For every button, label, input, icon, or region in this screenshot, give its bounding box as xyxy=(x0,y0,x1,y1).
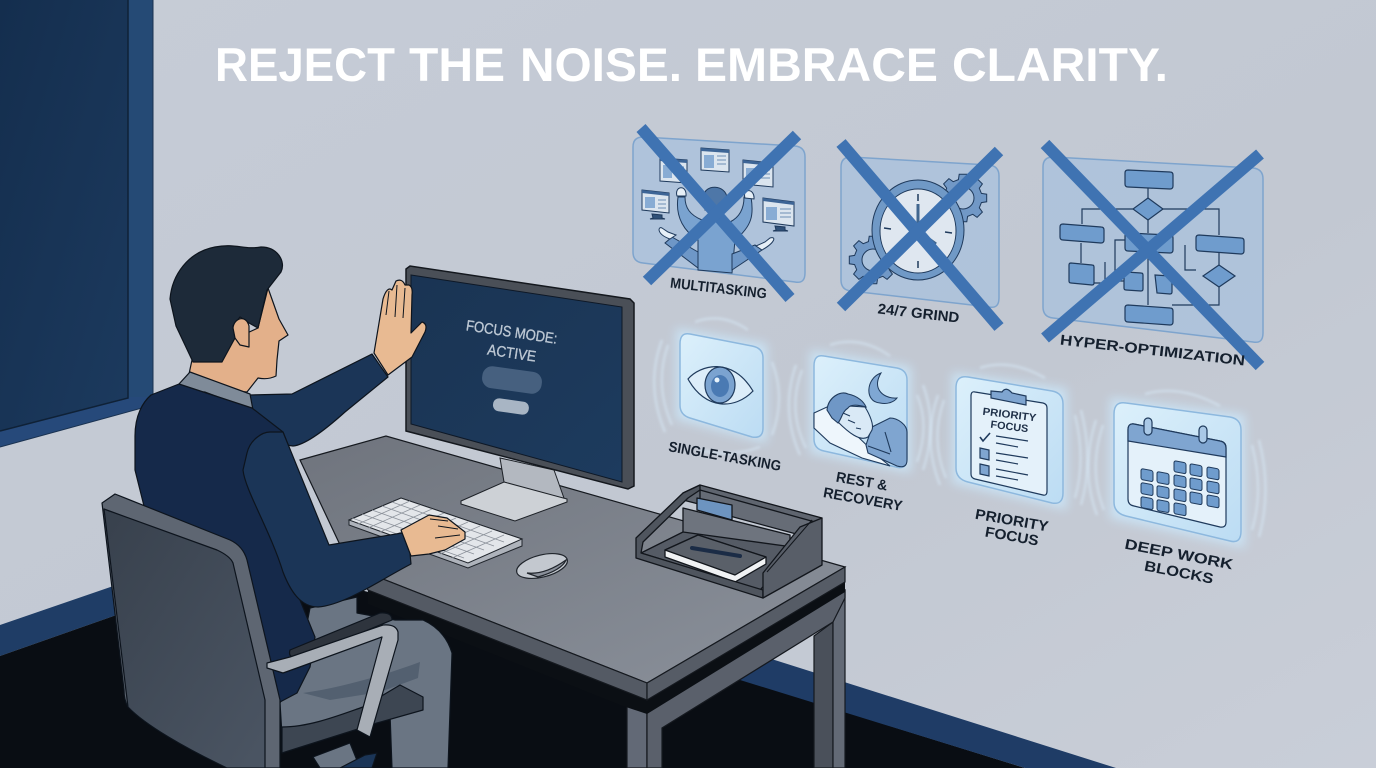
armrest pad xyxy=(290,613,392,658)
panel: hyper-optimization xyxy=(1043,144,1263,370)
tray sides xyxy=(636,485,763,598)
notebook xyxy=(665,535,766,582)
collar xyxy=(179,372,253,410)
desk tray with notebook xyxy=(636,485,822,598)
lower arm sleeve xyxy=(243,432,411,607)
panel: priority focus xyxy=(930,365,1088,550)
keyboard xyxy=(349,498,522,568)
armrest frame xyxy=(267,625,398,737)
tray back interior xyxy=(683,485,822,530)
chair seat xyxy=(282,685,423,753)
torso xyxy=(135,384,325,702)
glow: deep work blocks xyxy=(1088,391,1266,543)
icon: crossed out X xyxy=(641,128,797,298)
desk left leg xyxy=(627,705,662,768)
label: deep work blocks: DEEP WORK xyxy=(1123,537,1235,574)
title: REJECT xyxy=(215,38,395,91)
raised hand xyxy=(374,280,426,375)
label: priority focus: FOCUS xyxy=(984,524,1040,550)
panel: single-tasking xyxy=(654,318,782,475)
icon: crescent moon xyxy=(869,373,897,404)
icon: calendar xyxy=(1128,418,1226,527)
window xyxy=(0,0,153,447)
label: deep work blocks xyxy=(1123,537,1235,588)
icon: eye xyxy=(688,367,753,404)
label: 24/7 grind: 24/7 GRIND xyxy=(877,301,960,327)
panel: deep work blocks xyxy=(1088,391,1266,588)
icon: crossed out X xyxy=(841,143,999,327)
raised arm xyxy=(250,354,388,446)
monitor screen xyxy=(411,275,622,482)
chair tab xyxy=(116,598,126,609)
pen xyxy=(692,548,740,556)
glow: single-tasking xyxy=(654,318,779,453)
desk underside shadow xyxy=(368,580,845,714)
icon: sleeping person xyxy=(814,393,907,467)
label: rest and recovery: RECOVERY xyxy=(822,485,904,515)
tray floor xyxy=(641,532,800,590)
floor and baseboard xyxy=(0,582,1116,768)
icon: flowchart xyxy=(1060,170,1244,325)
monitor xyxy=(406,266,634,521)
ear xyxy=(233,319,249,347)
label: hyper-optimization: HYPER-OPTIMIZATION xyxy=(1059,333,1246,370)
glow: rest and recovery xyxy=(789,342,930,470)
text: priority focus on clipboard xyxy=(982,406,1037,435)
panel: 24/7 grind xyxy=(841,143,999,327)
hair xyxy=(170,246,282,362)
neck and face xyxy=(186,288,288,392)
monitor screen: ACTIVE xyxy=(486,342,537,366)
text: priority focus on clipboard: PRIORITY xyxy=(982,406,1037,424)
label: priority focus: PRIORITY xyxy=(974,507,1050,535)
title: CLARITY. xyxy=(952,38,1168,91)
label: multitasking: MULTITASKING xyxy=(669,276,768,302)
glow: priority focus xyxy=(930,365,1088,505)
person xyxy=(135,246,465,768)
icon: clipboard xyxy=(971,389,1047,495)
label: deep work blocks: BLOCKS xyxy=(1143,559,1215,588)
title: NOISE. xyxy=(520,38,682,91)
lower leg and shoe xyxy=(313,743,360,768)
desk xyxy=(300,436,845,768)
label: priority focus xyxy=(974,507,1050,550)
mouse xyxy=(514,549,570,583)
title: EMBRACE xyxy=(695,38,938,91)
label: rest and recovery xyxy=(822,470,904,515)
card in tray xyxy=(697,498,732,520)
label: rest and recovery: REST & xyxy=(835,470,889,495)
monitor screen: FOCUS MODE: xyxy=(465,317,558,348)
chair back xyxy=(102,494,280,768)
title: THE xyxy=(409,38,505,91)
monitor stand xyxy=(461,458,567,521)
icon: crossed out X xyxy=(1045,144,1260,366)
label: single-tasking: SINGLE-TASKING xyxy=(667,439,782,475)
panel: multitasking xyxy=(633,128,805,302)
office chair xyxy=(102,494,423,768)
desk right leg and apron xyxy=(647,590,845,768)
keyboard hand xyxy=(401,515,465,556)
panel: rest and recovery xyxy=(789,342,930,515)
text: priority focus on clipboard: FOCUS xyxy=(990,419,1029,435)
title xyxy=(215,38,1168,91)
lap xyxy=(280,597,452,768)
tray divider xyxy=(683,508,790,560)
icon: juggling screens person xyxy=(642,148,794,273)
icon: clock with gears xyxy=(849,174,987,284)
lap shadow xyxy=(303,662,420,700)
